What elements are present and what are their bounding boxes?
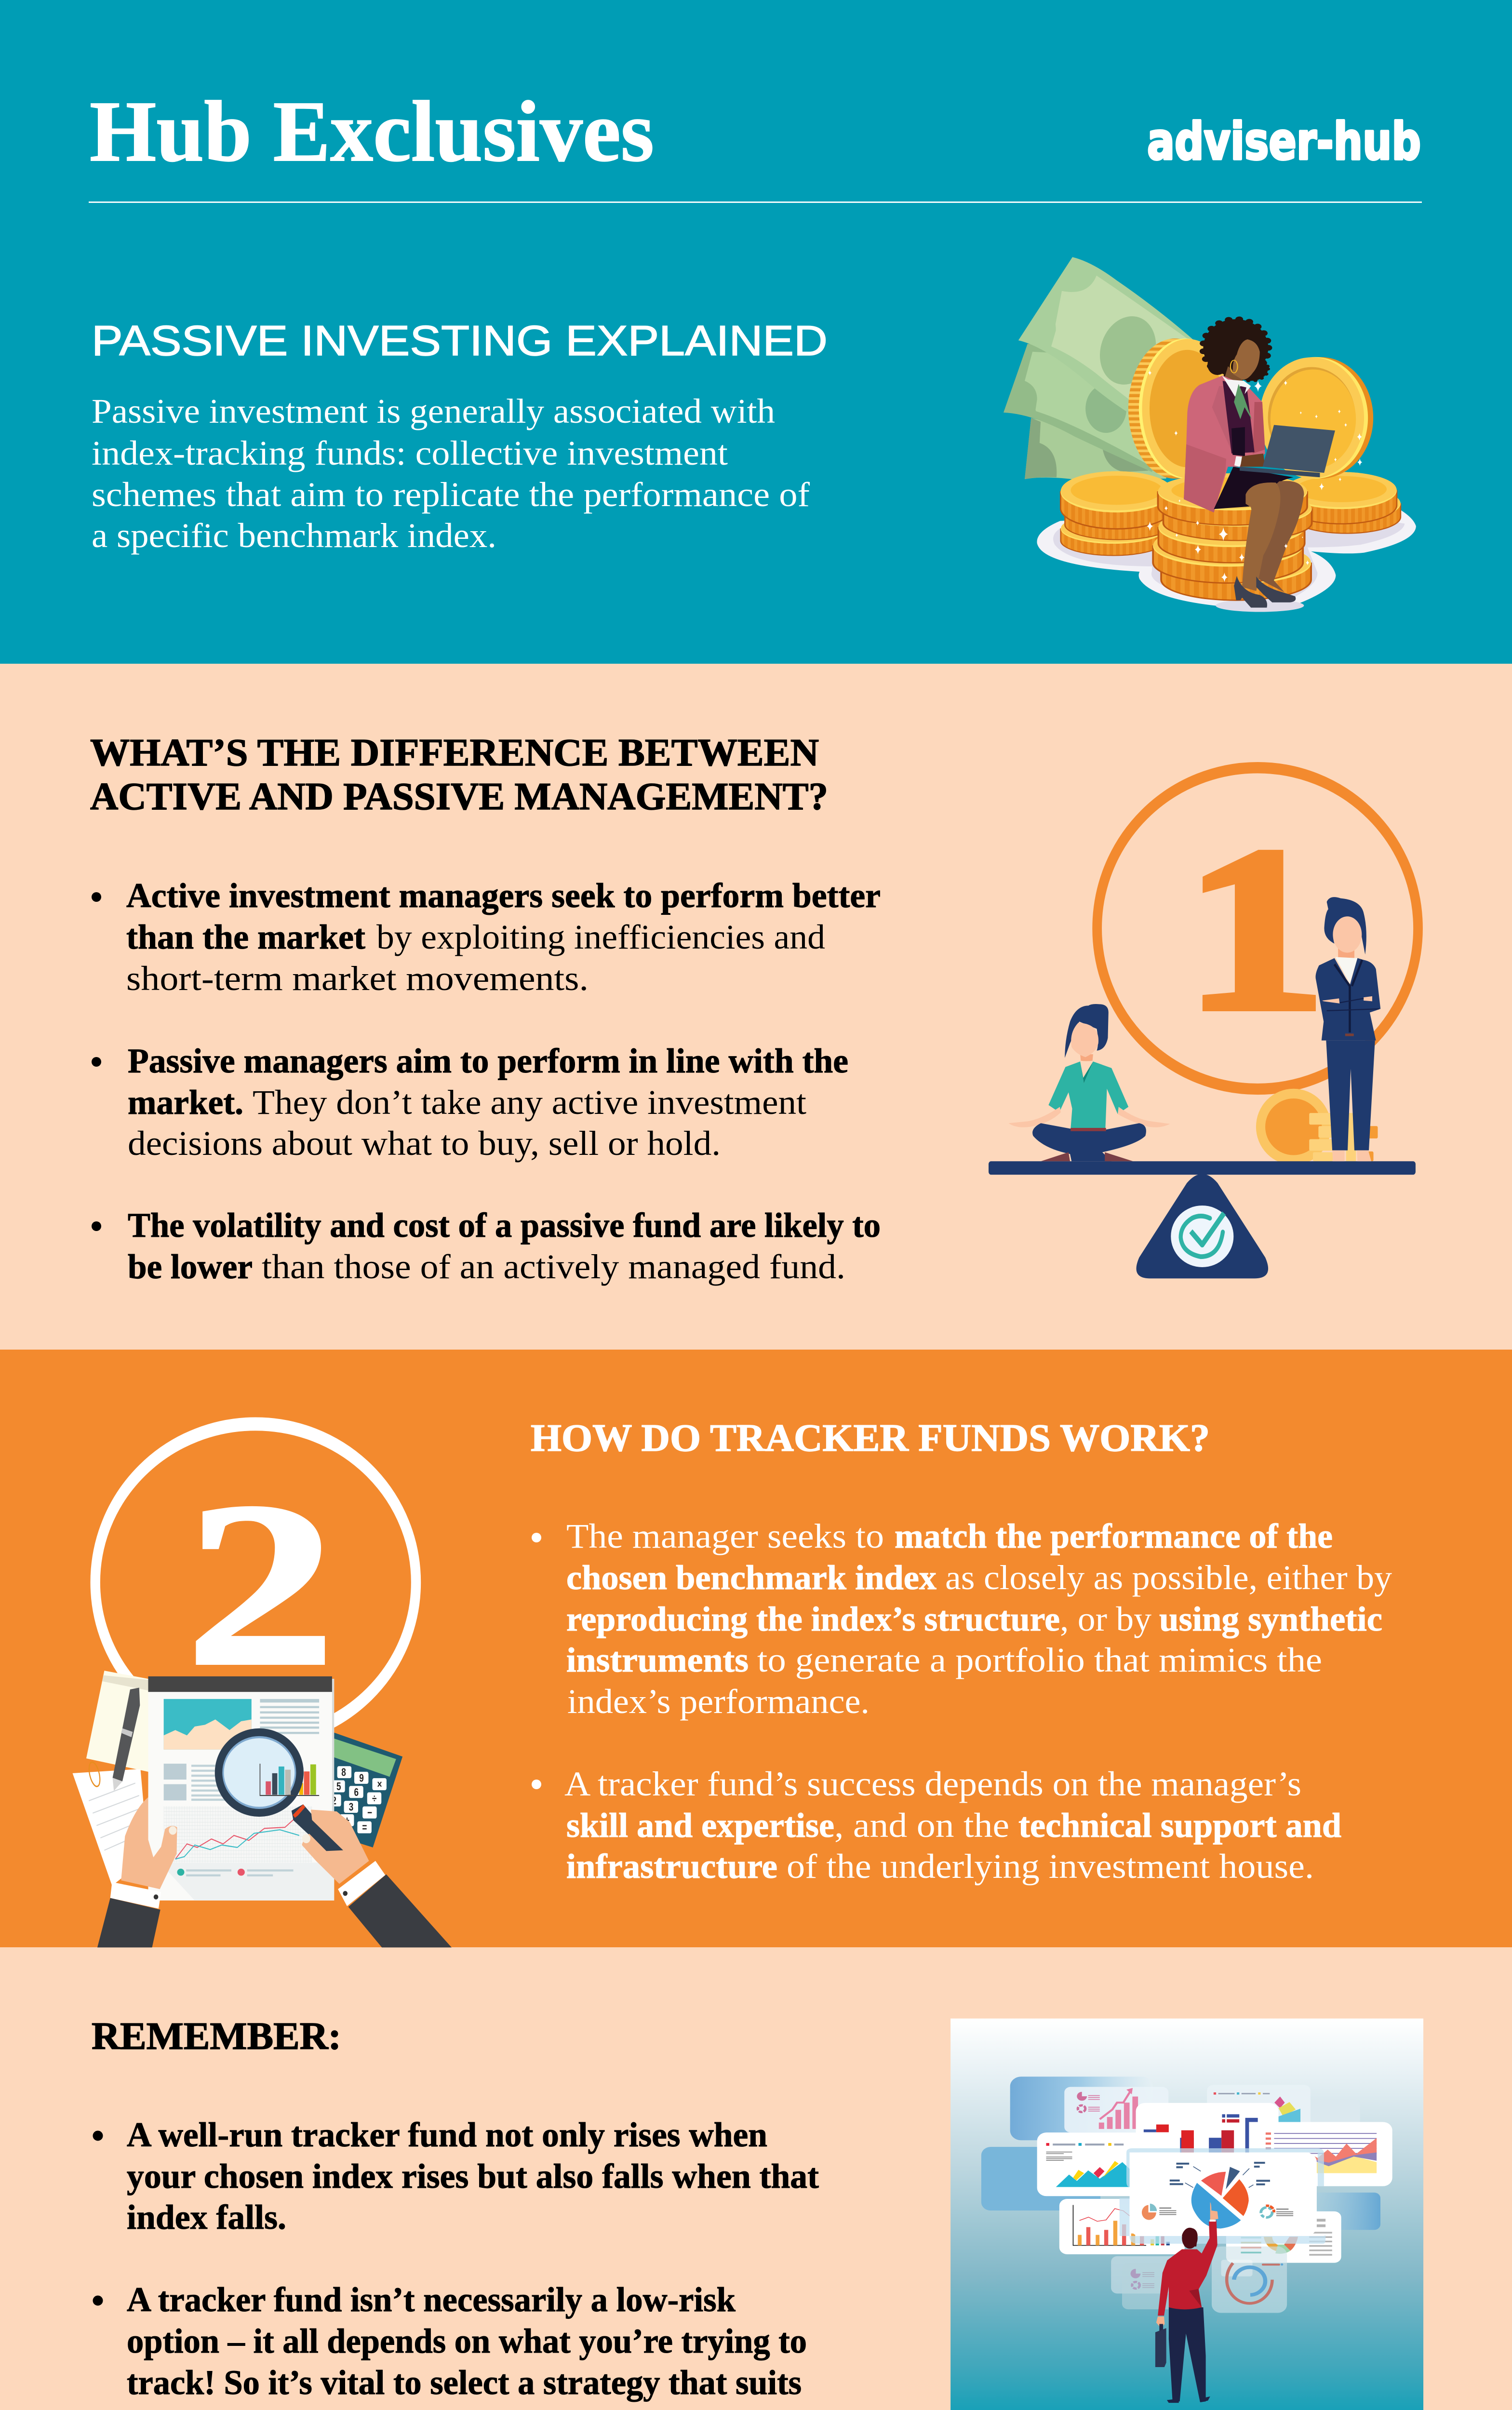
bullet: tracker fund success: technical support and xyxy=(1018,1806,1341,1845)
bullet: passive managers: market. xyxy=(128,1083,243,1122)
upright coin left xyxy=(1128,338,1234,479)
white panel: donut and list xyxy=(1226,2211,1341,2263)
upright coin right xyxy=(1259,357,1373,479)
panel: active vs passive management text xyxy=(90,732,881,1286)
title: Hub Exclusives xyxy=(90,83,654,179)
bullet: match the performance: index’s performance. xyxy=(567,1682,870,1721)
woman meditating xyxy=(1008,1004,1170,1161)
section background: header teal xyxy=(0,0,1512,664)
bullet: not necessarily low risk: option – it all depends on what you’re trying to xyxy=(127,2322,807,2360)
translucent panel: rising chart xyxy=(1064,2087,1168,2132)
calculator: 6 xyxy=(354,1786,359,1799)
bullet: match the performance: using synthetic xyxy=(1159,1600,1382,1638)
woman on laptop xyxy=(1184,319,1335,608)
heading: remember: REMEMBER: xyxy=(92,2015,341,2058)
calculator: = xyxy=(362,1821,367,1834)
bullet: match the performance: reproducing the index’s structure xyxy=(566,1600,1060,1638)
bullet: match the performance: , or by xyxy=(1060,1600,1151,1638)
panel: remember xyxy=(92,2015,819,2410)
center coin stack xyxy=(1153,473,1312,600)
bullet: active managers: by exploiting inefficiencies and xyxy=(376,918,825,956)
logo: adviser-hub: adviser-hub xyxy=(1147,112,1421,171)
white panel: area chart xyxy=(1250,2122,1392,2186)
bullet: passive managers: Passive managers aim to perform in line with the xyxy=(128,1042,848,1080)
scale beam xyxy=(989,1161,1416,1175)
bullet: not necessarily low risk xyxy=(93,2280,807,2410)
icon: check mark xyxy=(1171,1205,1233,1267)
white panel: bar chart xyxy=(1136,2103,1279,2156)
ring around number xyxy=(95,1424,416,1741)
bullet: tracker fund success: of the underlying investment house. xyxy=(787,1847,1314,1886)
bullet: active managers xyxy=(92,876,881,998)
sparkles xyxy=(1147,370,1362,582)
heading: what's the difference: WHAT’S THE DIFFERENCE BETWEEN xyxy=(90,732,819,774)
lower translucent panels xyxy=(1111,2247,1287,2313)
back blue panels xyxy=(981,2076,1380,2230)
number 2: 2 xyxy=(185,1454,336,1714)
bullet: match the performance: chosen benchmark index xyxy=(566,1558,937,1597)
notepad and pen xyxy=(73,1671,148,1886)
bullet: active managers: than the market xyxy=(126,918,365,956)
illustration: number 1 with balance scale xyxy=(989,768,1418,1278)
illustration: number 2 with report and magnifier xyxy=(73,1424,452,1947)
translucent blue overlay xyxy=(1120,2148,1325,2244)
hands and sleeves xyxy=(97,1797,452,1947)
bullet: rises and falls: your chosen index rises but also falls when that xyxy=(127,2157,819,2196)
bullet: passive managers: decisions about what to buy, sell or hold. xyxy=(128,1124,721,1163)
plate shadow under coins xyxy=(1037,508,1416,612)
bullet: volatility and cost: than those of an actively managed fund. xyxy=(262,1247,845,1286)
calculator: − xyxy=(367,1807,372,1819)
bullet: rises and falls: A well-run tracker fund not only rises when xyxy=(127,2115,767,2154)
report document xyxy=(148,1676,334,1901)
balance coin and stacks xyxy=(1256,1089,1378,1165)
woman in suit standing xyxy=(1315,897,1380,1161)
bullet: tracker fund success: infrastructure xyxy=(566,1847,777,1886)
bullet: match the performance: match the performance of the xyxy=(895,1517,1333,1555)
ring around number xyxy=(1097,768,1418,1089)
bullet: tracker fund success: A tracker fund’s success depends on the manager’s xyxy=(564,1765,1301,1803)
bullet: tracker fund success: , and on the xyxy=(834,1806,1009,1845)
right coin stack xyxy=(1285,472,1401,534)
bullet: rises and falls: index falls. xyxy=(127,2198,286,2236)
translucent panel: top right legend xyxy=(1207,2085,1311,2140)
panel: how do tracker funds work xyxy=(531,1417,1392,1886)
calculator: × xyxy=(377,1778,382,1791)
panel: passive investing intro xyxy=(92,317,828,555)
calculator: + xyxy=(345,1814,349,1827)
white panel: mountains chart xyxy=(1037,2132,1156,2196)
calculator: 3 xyxy=(349,1801,353,1813)
heading: what's the difference xyxy=(90,732,828,818)
heading: how do tracker funds work: HOW DO TRACKER FUNDS WORK? xyxy=(531,1417,1210,1459)
bullet: active managers: short-term market movements. xyxy=(126,959,589,998)
central white panel: pie chart xyxy=(1130,2153,1317,2236)
calculator xyxy=(332,1732,402,1848)
illustration: man pointing at data dashboards xyxy=(950,2019,1423,2410)
bullet: match the performance: The manager seeks to xyxy=(566,1517,884,1555)
text block: intro paragraph: Passive investment is generally associated with xyxy=(92,392,775,430)
calculator: 2 xyxy=(332,1794,336,1807)
bullet: rises and falls xyxy=(93,2115,819,2236)
bullet: passive managers xyxy=(92,1042,848,1163)
bullet: tracker fund success: skill and expertise xyxy=(566,1806,834,1845)
white panel: combo bars and lines xyxy=(1059,2199,1185,2254)
magnifying glass xyxy=(215,1728,343,1851)
text block: intro paragraph xyxy=(92,392,810,555)
section background: active vs passive peach xyxy=(0,664,1512,1350)
bullet: not necessarily low risk: A tracker fund isn’t necessarily a low-risk xyxy=(127,2280,736,2319)
bullet: volatility and cost: The volatility and cost of a passive fund are likely to xyxy=(128,1206,881,1245)
bullet: volatility and cost: be lower xyxy=(128,1247,253,1286)
heading: what's the difference: ACTIVE AND PASSIVE MANAGEMENT? xyxy=(90,776,828,818)
gradient backdrop xyxy=(950,2019,1423,2410)
calculator: 9 xyxy=(359,1772,364,1784)
left coin stack xyxy=(1060,471,1173,556)
bullet: not necessarily low risk: track! So it’s vital to select a strategy that suits xyxy=(127,2363,802,2402)
text block: intro paragraph: index-tracking funds: collective investment xyxy=(92,434,728,472)
calculator: 5 xyxy=(336,1781,341,1793)
section background: tracker funds orange xyxy=(0,1350,1512,1947)
section background: remember peach xyxy=(0,1947,1512,2410)
scale pivot xyxy=(1137,1174,1268,1278)
illustration: woman with laptop sitting on coins and banknotes xyxy=(1004,257,1416,612)
bullet: active managers: Active investment managers seek to perform better xyxy=(126,876,881,915)
bullet: match the performance: instruments xyxy=(566,1641,749,1679)
bullet: match the performance: to generate a portfolio that mimics the xyxy=(757,1641,1322,1679)
banknotes xyxy=(1004,257,1198,480)
bullet: match the performance: as closely as possible, either by xyxy=(945,1558,1392,1597)
bullet: match the performance xyxy=(532,1517,1392,1721)
heading: passive investing explained: PASSIVE INVESTING EXPLAINED xyxy=(92,317,828,364)
man in red shirt xyxy=(1155,2202,1218,2403)
calculator: 8 xyxy=(341,1766,346,1779)
text block: intro paragraph: schemes that aim to replicate the performance of xyxy=(92,475,810,514)
bullet: passive managers: They don’t take any active investment xyxy=(253,1083,806,1122)
bullet: volatility and cost xyxy=(92,1206,881,1286)
bullet: tracker fund success xyxy=(532,1765,1341,1886)
number 1: 1 xyxy=(1184,800,1326,1059)
calculator: ÷ xyxy=(372,1792,376,1805)
text block: intro paragraph: a specific benchmark index. xyxy=(92,516,496,555)
